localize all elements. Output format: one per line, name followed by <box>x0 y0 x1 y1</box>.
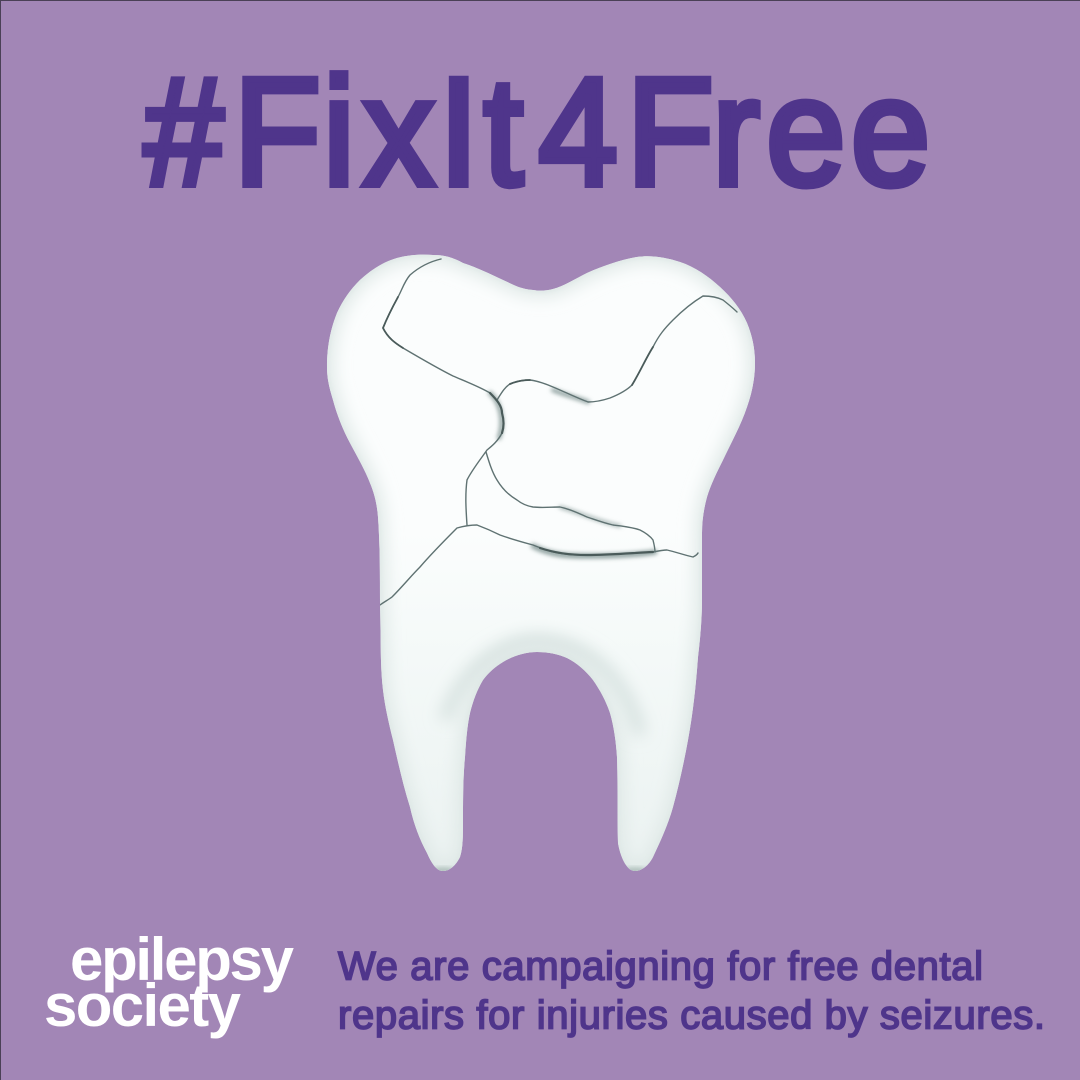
campaign message <box>338 944 1045 1038</box>
campaign message: We are campaigning for free dental <box>338 944 983 988</box>
root tip shading <box>435 865 452 871</box>
logo: epilepsy society: society <box>44 972 242 1039</box>
logo: epilepsy society <box>44 926 295 1039</box>
campaign message: repairs for injuries caused by seizures. <box>338 994 1045 1038</box>
root arch shadow <box>445 640 640 735</box>
crack shadows <box>490 390 655 556</box>
cracks <box>380 259 737 605</box>
heavy crack segments <box>383 297 653 555</box>
title: #FixIt4Free <box>144 47 930 218</box>
soft edge shading <box>327 255 755 871</box>
logo: epilepsy society: epilepsy <box>70 926 295 993</box>
illustration: cracked tooth <box>327 255 755 877</box>
